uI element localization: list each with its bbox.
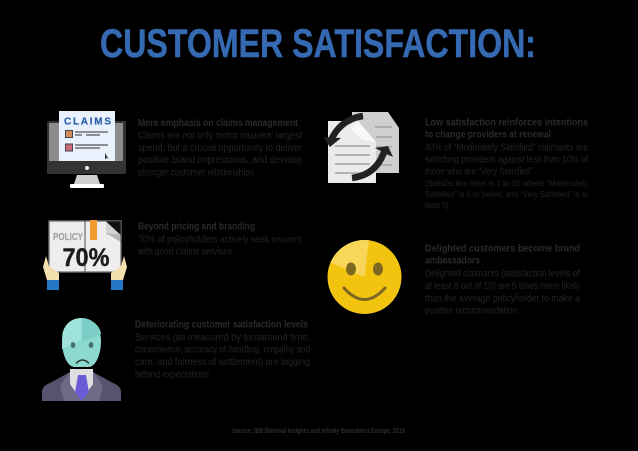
icon: claims monitor — [47, 111, 126, 188]
text: claims management: More emphasis on claims management — [138, 117, 298, 129]
text: deteriorating satisfaction: behind expectations — [135, 370, 209, 380]
text: deteriorating satisfaction: convenience, accuracy of handling, empathy and — [135, 344, 310, 356]
text: beyond pricing: 70% of policyholders actively seek insurers — [138, 234, 302, 246]
text: low satisfaction — [425, 116, 589, 210]
text: claims management: stronger customer relationships — [138, 168, 254, 178]
text: deteriorating satisfaction: care, and fairness of settlement) are lagging — [135, 357, 310, 368]
text: low satisfaction: [Satisfaction level is 1 to 10 where “Moderately — [425, 178, 589, 188]
text: delighted customers: ambassadors — [425, 254, 480, 266]
text: deteriorating satisfaction — [135, 318, 310, 380]
text: low satisfaction: switching providers against less than 10% of — [425, 154, 588, 166]
text: beyond pricing: Beyond pricing and branding — [138, 220, 255, 232]
text: low satisfaction: Satisfied” is 6 or below, and “Very Satisfied” is at — [425, 189, 589, 199]
text: low satisfaction: least 9] — [425, 200, 448, 210]
text: beyond pricing: with good claims services — [137, 246, 232, 258]
text: deteriorating satisfaction: Services (as measured by turnaround time, — [135, 332, 310, 344]
icon: policy book: POLICY — [53, 232, 83, 243]
text: low satisfaction: to change providers at renewal — [425, 128, 551, 140]
text: delighted customers: than the average policyholder to make a — [425, 294, 580, 304]
text: deteriorating satisfaction: Deteriorating customer satisfaction levels — [135, 318, 308, 330]
icon: documents with renewal arrows — [323, 112, 399, 183]
source note: Source: IBB Biennial Insights and Infinity Bancdirect Europe, 2015 — [232, 428, 405, 435]
icon: unhappy customer — [42, 318, 121, 401]
text: delighted customers: Delighted customers become brand — [425, 242, 580, 254]
text: low satisfaction: Low satisfaction reinforces intentions — [425, 116, 588, 128]
text: claims management: Claims are not only motor insurers’ largest — [138, 130, 302, 142]
text: beyond pricing — [137, 220, 302, 258]
icon: policy book — [43, 220, 127, 290]
title: CUSTOMER SATISFACTION: — [100, 22, 536, 66]
text: delighted customers: positive recommendation — [425, 306, 517, 316]
text: claims management: positive brand impressions, and develop — [138, 155, 302, 166]
text: low satisfaction: those who are “Very Satisfied” — [425, 166, 533, 178]
text: low satisfaction: 40% of “Moderately Satisfied” claimants are — [425, 142, 588, 154]
text: claims management — [138, 117, 303, 178]
icon: policy book: 70% — [62, 244, 110, 272]
text: delighted customers: Delighted claimants (satisfaction levels of — [425, 268, 580, 280]
text: delighted customers — [425, 242, 580, 316]
text: delighted customers: at least 8 out of 10) are 5 times more likely — [425, 281, 580, 292]
icon: smiley face — [328, 240, 402, 314]
icon: claims monitor: CLAIMS — [64, 116, 111, 128]
text: claims management: spend, but a crucial opportunity to deliver — [138, 143, 303, 154]
